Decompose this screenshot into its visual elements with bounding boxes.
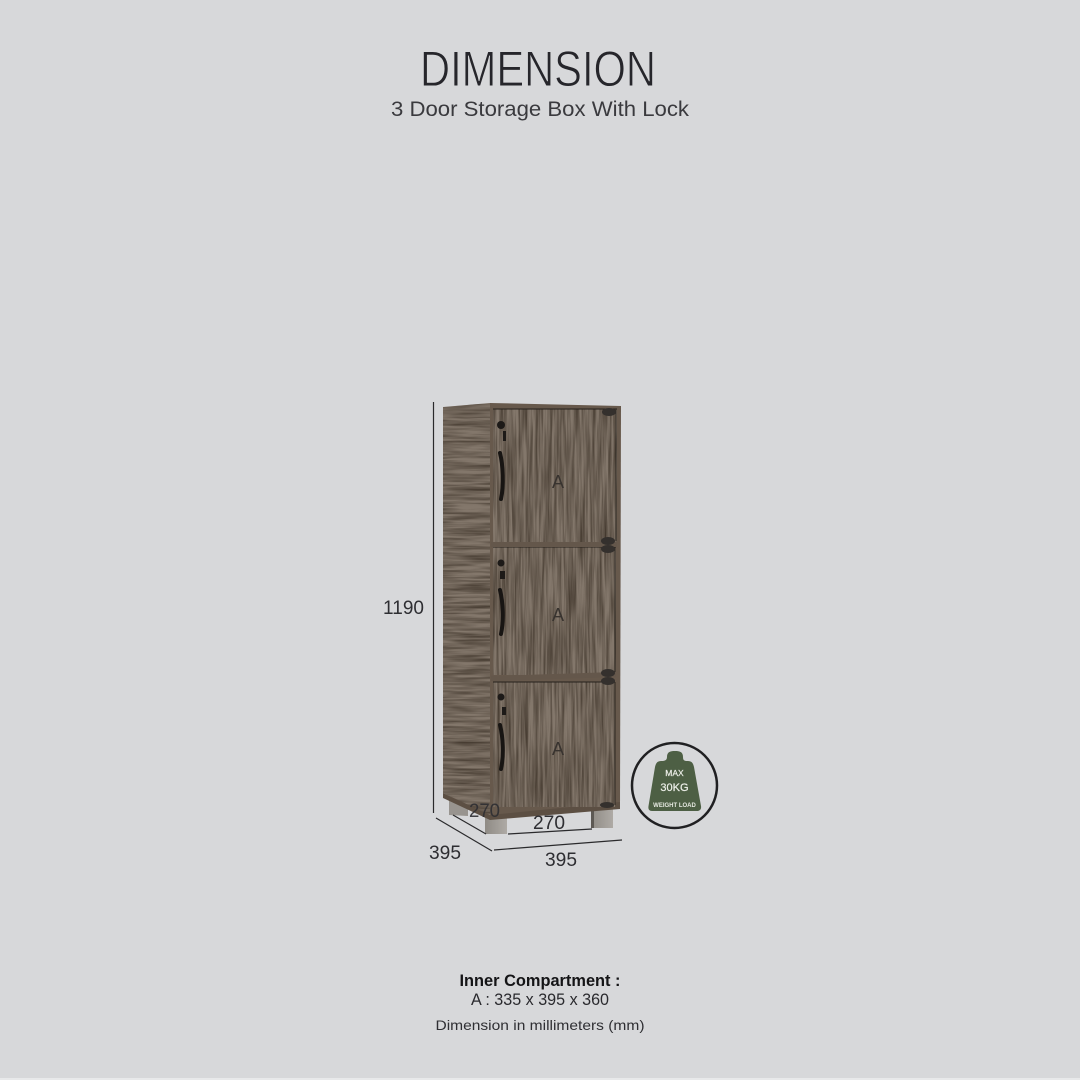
door: middle	[493, 547, 616, 675]
icon: kettlebell weight	[648, 751, 701, 811]
door handle	[500, 453, 503, 499]
title: DIMENSION	[420, 41, 656, 97]
lock and key	[498, 694, 506, 715]
door: top	[493, 409, 617, 542]
dimension: outer width 395: 395	[545, 850, 577, 871]
dimension: outer depth 395	[429, 818, 492, 864]
cabinet side panel	[443, 403, 490, 816]
dimension: inner depth 270	[453, 801, 500, 834]
units note: Dimension in millimeters (mm)	[436, 1017, 644, 1033]
icon: max weight load badge: WEIGHT LOAD	[653, 803, 696, 809]
cabinet base edge	[443, 793, 620, 820]
icon: max weight load badge	[632, 743, 717, 828]
cabinet legs	[449, 797, 613, 834]
inner compartment heading: Inner Compartment :	[460, 972, 620, 990]
label A: A	[552, 739, 564, 759]
dimension: inner depth 270: 270	[469, 801, 500, 822]
lock and key	[498, 560, 505, 579]
door: bottom	[493, 682, 615, 807]
dimension: height 1190: 1190	[383, 598, 424, 619]
dimension: outer width 395	[494, 840, 622, 871]
inner compartment dimensions: A : 335 x 395 x 360	[471, 991, 609, 1009]
lock and key	[497, 421, 506, 441]
label A: A	[552, 605, 564, 625]
door handle	[500, 725, 503, 769]
dimension: inner width 270	[508, 813, 592, 834]
cabinet front frame	[490, 403, 621, 819]
bottom edge strip	[0, 1078, 1080, 1080]
dimension: outer depth 395: 395	[429, 843, 461, 864]
dimension: inner width 270: 270	[533, 813, 565, 834]
storage cabinet illustration	[443, 403, 621, 834]
label A: A	[552, 472, 564, 492]
subtitle: 3 Door Storage Box With Lock	[391, 98, 690, 121]
door handle	[500, 590, 503, 634]
door hinges	[600, 408, 616, 808]
icon: max weight load badge: 30KG	[660, 782, 689, 794]
weight label: MAX	[665, 768, 684, 778]
shelf dividers	[491, 542, 617, 681]
